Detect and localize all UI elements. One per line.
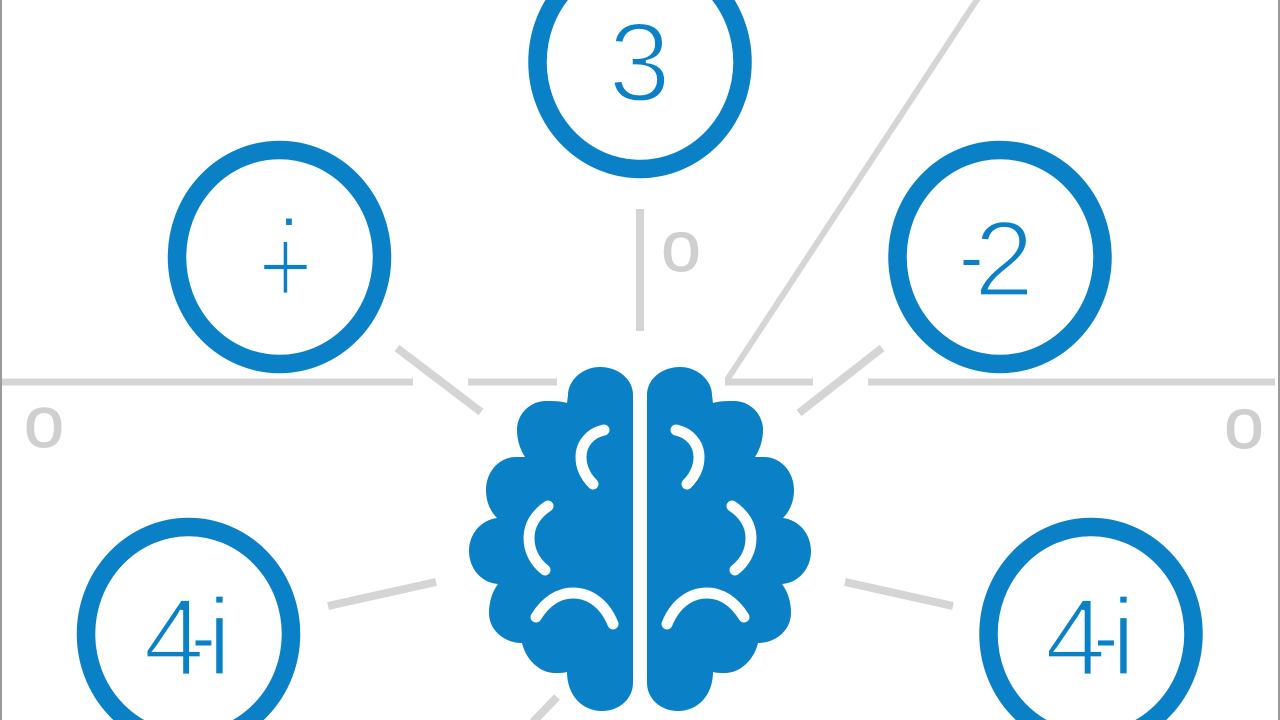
circle: upper right value -2: 2 — [974, 198, 1034, 319]
circle: lower left value 4-i — [86, 527, 291, 720]
circle: upper right value -2: - — [961, 220, 982, 294]
icon: brain — [469, 367, 811, 711]
circle: lower right value 4-i: i — [1111, 576, 1136, 699]
label: center zero: o — [661, 208, 701, 287]
circle: upper left plus: . — [281, 171, 297, 238]
circle: lower left value 4-i: i — [207, 576, 232, 699]
circle: lower right value 4-i: 4 — [1045, 576, 1106, 699]
circle: upper left plus: + — [258, 204, 313, 328]
circle: lower left value 4-i: 4 — [143, 576, 205, 699]
circle: lower right value 4-i — [988, 527, 1194, 720]
circle: lower left value 4-i: - — [193, 601, 214, 674]
circle: upper left plus — [177, 150, 382, 364]
circle: upper right value -2 — [898, 150, 1102, 364]
circle: lower right value 4-i: - — [1095, 601, 1117, 674]
label: left zero: o — [24, 383, 64, 463]
label: right zero: o — [1224, 385, 1264, 464]
circle: top value 3: 3 — [608, 0, 671, 125]
circle: top value 3 — [538, 0, 742, 169]
